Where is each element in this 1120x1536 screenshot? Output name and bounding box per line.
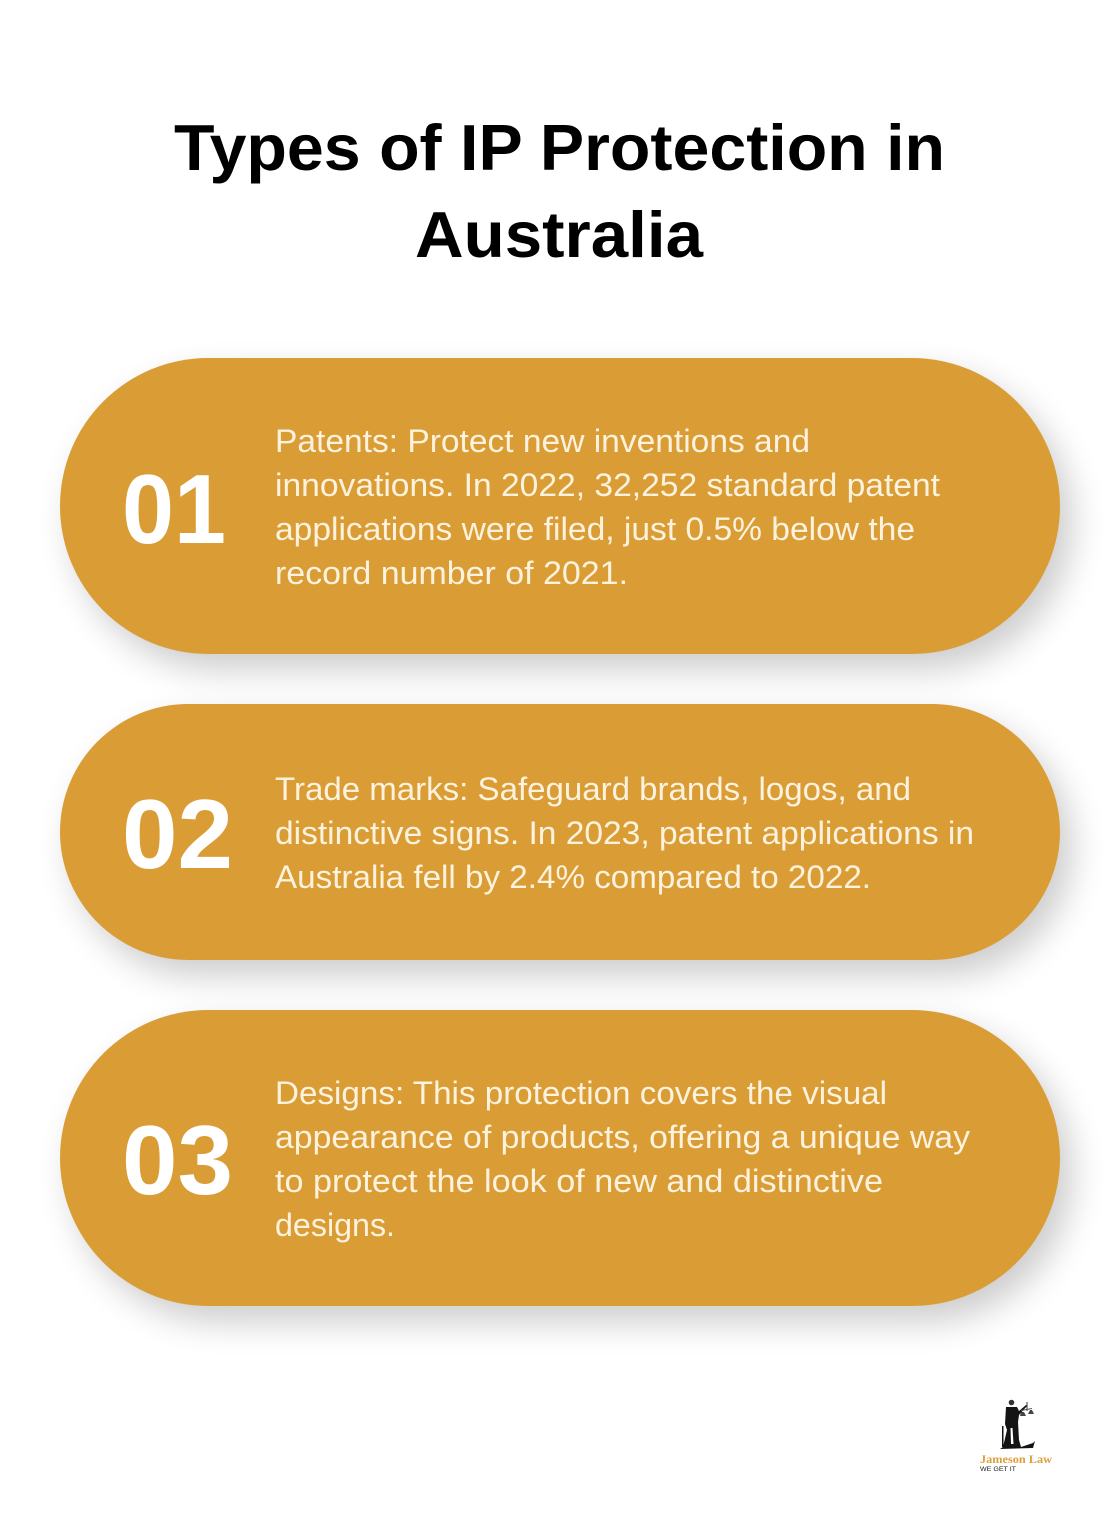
text: patents description: innovations. In 2022, 32,252 standard patent — [275, 467, 940, 503]
text: trade marks description — [275, 771, 974, 895]
title: Types of IP Protection in — [174, 111, 945, 184]
number 01: 01 — [122, 454, 226, 564]
text: patents description: applications were filed, just 0.5% below the — [275, 511, 915, 547]
text: designs description: to protect the look of new and distinctive — [275, 1163, 883, 1199]
title — [174, 111, 945, 271]
text: designs description: Designs: This protection covers the visual — [275, 1075, 887, 1111]
text: patents description: Patents: Protect new inventions and — [275, 423, 810, 459]
logo tagline: WE GET IT — [980, 1466, 1016, 1473]
text: designs description: designs. — [275, 1207, 395, 1243]
text: trade marks description: Australia fell by 2.4% compared to 2022. — [275, 859, 871, 895]
panel: designs — [60, 1010, 1060, 1306]
text: trade marks description: distinctive signs. In 2023, patent applications in — [275, 815, 974, 851]
panel: patents — [60, 358, 1060, 654]
text: designs description: appearance of products, offering a unique way — [275, 1119, 970, 1155]
text: trade marks description: Trade marks: Safeguard brands, logos, and — [275, 771, 911, 807]
number 03: 03 — [122, 1105, 233, 1215]
text: patents description — [275, 423, 940, 591]
text: patents description: record number of 2021. — [275, 555, 628, 591]
text: designs description — [275, 1075, 970, 1243]
number 02: 02 — [122, 779, 233, 889]
title: Australia — [415, 198, 704, 271]
logo wordmark: Jameson Law — [980, 1454, 1053, 1466]
icon: lady justice — [1000, 1400, 1035, 1449]
panel: trade marks — [60, 704, 1060, 960]
